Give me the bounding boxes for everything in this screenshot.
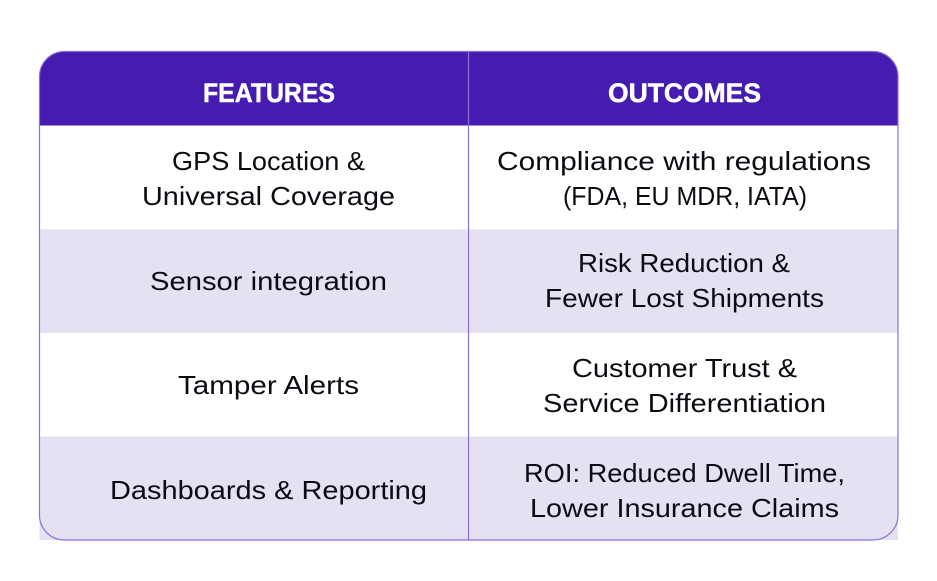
- feature: GPS location: GPS Location &: [172, 146, 365, 176]
- outcome: ROI: [524, 458, 845, 523]
- outcome: compliance: [497, 146, 871, 211]
- column divider: [468, 51, 470, 540]
- outcome: risk reduction: Fewer Lost Shipments: [545, 283, 824, 313]
- row 4 background: [40, 436, 898, 540]
- outcome: compliance: Compliance with regulations: [497, 146, 871, 176]
- outcome: risk reduction: [545, 248, 824, 313]
- feature: GPS location: Universal Coverage: [142, 181, 395, 211]
- outcome: customer trust: Service Differentiation: [543, 388, 826, 418]
- header band: [40, 51, 898, 126]
- outcome: ROI: Lower Insurance Claims: [530, 493, 839, 523]
- feature: GPS location: [142, 146, 395, 211]
- feature: dashboards and reporting: Dashboards & Reporting: [110, 475, 427, 505]
- outcome: ROI: ROI: Reduced Dwell Time,: [524, 458, 845, 488]
- row 2 background: [40, 230, 898, 333]
- heading: features: FEATURES: [203, 78, 335, 108]
- outcome: customer trust: Customer Trust &: [572, 353, 797, 383]
- outcome: customer trust: [543, 353, 826, 418]
- outcome: risk reduction: Risk Reduction &: [578, 248, 790, 278]
- comparison table: [40, 51, 898, 540]
- feature: tamper alerts: Tamper Alerts: [178, 370, 359, 400]
- feature: sensor integration: Sensor integration: [150, 266, 387, 296]
- heading: outcomes: OUTCOMES: [608, 78, 761, 108]
- table outline: [40, 52, 898, 540]
- outcome: compliance: (FDA, EU MDR, IATA): [563, 181, 807, 211]
